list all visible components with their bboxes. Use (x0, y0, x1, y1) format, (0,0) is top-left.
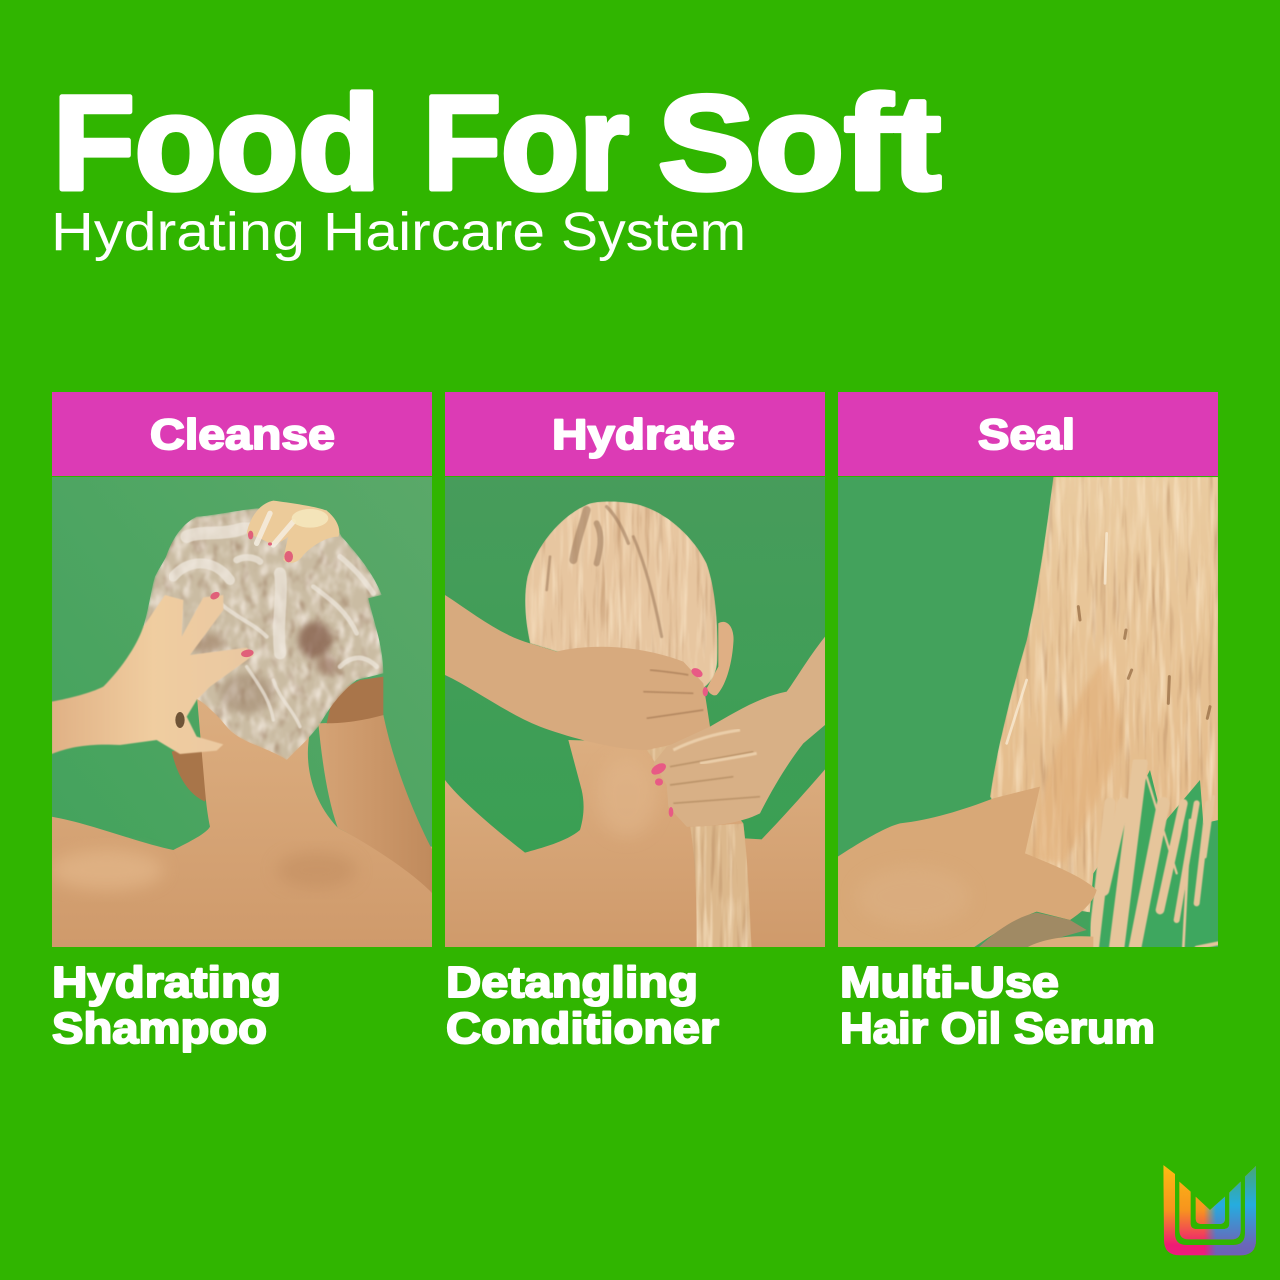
header: hydrate (445, 392, 825, 476)
raised right arm (318, 715, 432, 893)
back and neck (52, 693, 432, 948)
scalp patches (298, 622, 332, 658)
right hand (653, 637, 825, 827)
light strands (1007, 533, 1107, 743)
product name: multi-use hair oil serum: Hair Oil Serum (840, 1004, 1155, 1053)
title: Food (53, 69, 380, 218)
hand (838, 787, 1097, 948)
icon: rainbow brand logo (1163, 1165, 1256, 1256)
header: hydrate: Hydrate (552, 411, 735, 459)
jaw shadow (172, 750, 206, 802)
foam highlights (173, 527, 377, 727)
ear shadow (175, 712, 185, 728)
shaded back area (286, 856, 348, 882)
ear (707, 622, 734, 695)
panel: hydrate (445, 392, 825, 1053)
product name: multi-use hair oil serum: Multi-Use (840, 958, 1059, 1007)
nails (649, 666, 708, 817)
photo: shampooing hair (50, 477, 432, 948)
hand (52, 595, 254, 754)
lower hair strands (1093, 763, 1218, 948)
panel: seal (838, 392, 1218, 1053)
long blonde hair (990, 477, 1218, 913)
product name: detangling conditioner: Conditioner (446, 1004, 719, 1053)
product name: detangling conditioner: Detangling (446, 958, 698, 1007)
head of slicked hair (525, 501, 718, 688)
title: Soft (658, 69, 941, 218)
product name: hydrating shampoo: Hydrating (52, 958, 281, 1007)
subtitle: System (561, 202, 746, 262)
product name: hydrating shampoo (52, 958, 281, 1053)
header: cleanse: Cleanse (150, 411, 335, 459)
product name: multi-use hair oil serum (840, 958, 1155, 1053)
subtitle (51, 202, 746, 262)
subtitle: Haircare (323, 202, 545, 262)
gaps between strands (1090, 770, 1218, 913)
panel: cleanse (50, 392, 432, 1053)
back and neck (445, 740, 825, 948)
title: For (423, 69, 629, 218)
warmer lower strands (1036, 658, 1119, 864)
photo: hair serum (838, 477, 1218, 948)
product name: detangling conditioner (446, 958, 719, 1053)
header: cleanse (52, 392, 432, 476)
nails (209, 531, 293, 658)
photo: detangling ponytail (445, 477, 825, 948)
subtitle: Hydrating (51, 202, 305, 262)
product name: hydrating shampoo: Shampoo (52, 1004, 267, 1053)
dark roots (547, 507, 662, 637)
header: seal (838, 392, 1218, 476)
ponytail (647, 727, 752, 948)
header: seal: Seal (978, 411, 1075, 459)
dark accents (1078, 607, 1210, 718)
hair under the finger (978, 913, 1087, 948)
top fingers (247, 501, 339, 563)
foam-covered hair (143, 508, 383, 760)
title (53, 69, 941, 218)
left forearm and hand (445, 595, 710, 750)
